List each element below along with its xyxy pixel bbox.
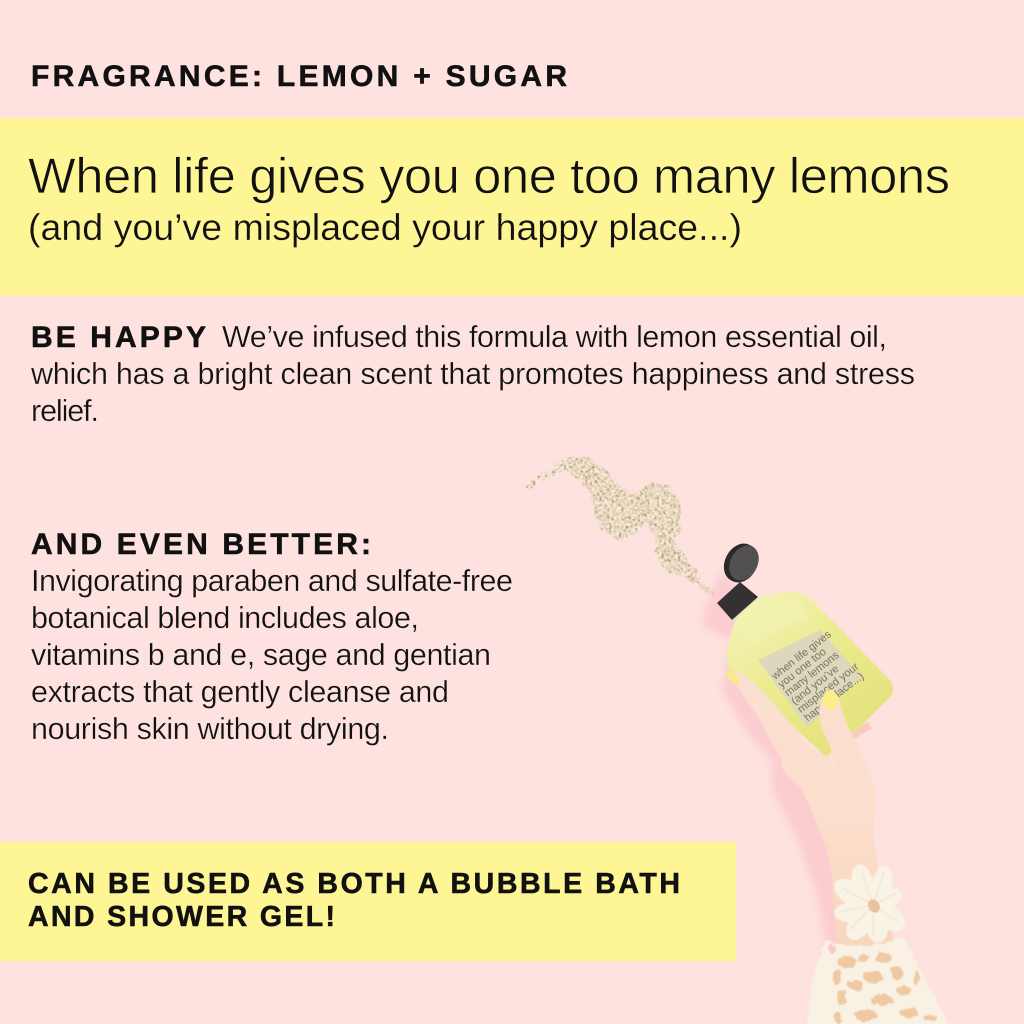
callout: bubble bath and shower gel: CAN BE USED AS BOTH A BUBBLE BATH bbox=[28, 868, 680, 900]
bottle label bbox=[758, 627, 868, 727]
callout: bubble bath and shower gel bbox=[0, 842, 736, 961]
bottle label: misplaced your bbox=[796, 661, 862, 716]
text block: and even better: botanical blend includes aloe, bbox=[31, 601, 419, 635]
text block: be happy: which has a bright clean scent that promotes happiness and stress bbox=[30, 357, 915, 391]
text block: and even better: vitamins b and e, sage and gentian bbox=[31, 638, 491, 672]
lace flower bbox=[829, 862, 910, 945]
text block: and even better: nourish skin without drying. bbox=[31, 712, 389, 746]
panel: headline band bbox=[0, 118, 1024, 296]
bottle highlight bbox=[745, 600, 812, 650]
text block: and even better bbox=[31, 528, 513, 746]
text block: and even better: AND EVEN BETTER: bbox=[31, 528, 371, 561]
bottle cap bbox=[717, 538, 765, 620]
heading: When life gives you one too many lemons bbox=[28, 147, 950, 204]
bottle label: (and you’ve bbox=[789, 663, 841, 707]
illustration: glitter swirl bbox=[525, 456, 718, 597]
flower centre bbox=[866, 897, 882, 915]
illustration: bottle bbox=[717, 538, 893, 757]
text block: and even better: Invigorating paraben and sulfate-free bbox=[31, 564, 513, 598]
fingernail: thumb bbox=[822, 690, 838, 710]
bottle label: you one too bbox=[776, 646, 829, 691]
bottle label: happy place...) bbox=[802, 670, 866, 724]
subheading: (and you’ve misplaced your happy place...) bbox=[28, 206, 742, 248]
bottle neck bbox=[732, 597, 766, 628]
bottle body bbox=[726, 592, 893, 757]
sleeve mesh bbox=[806, 937, 950, 1024]
text block: be happy: BE HAPPY bbox=[31, 321, 206, 354]
text block: be happy bbox=[30, 320, 915, 428]
title: FRAGRANCE: LEMON + SUGAR bbox=[31, 60, 567, 93]
text block: and even better: extracts that gently cleanse and bbox=[31, 675, 449, 709]
illustration: cast shadow bbox=[702, 570, 845, 1024]
text block: be happy: We’ve infused this formula with lemon essential oil, bbox=[222, 320, 887, 354]
illustration: hand bbox=[724, 667, 895, 950]
callout: bubble bath and shower gel: AND SHOWER GEL! bbox=[28, 901, 335, 933]
bottle label: many lemons bbox=[783, 649, 842, 699]
illustration: right shadow bbox=[840, 722, 872, 745]
fingernail: index bbox=[724, 667, 742, 687]
illustration: lace sleeve bbox=[806, 862, 950, 1024]
bottle label: when life gives bbox=[769, 628, 834, 683]
text block: be happy: relief. bbox=[31, 394, 99, 428]
